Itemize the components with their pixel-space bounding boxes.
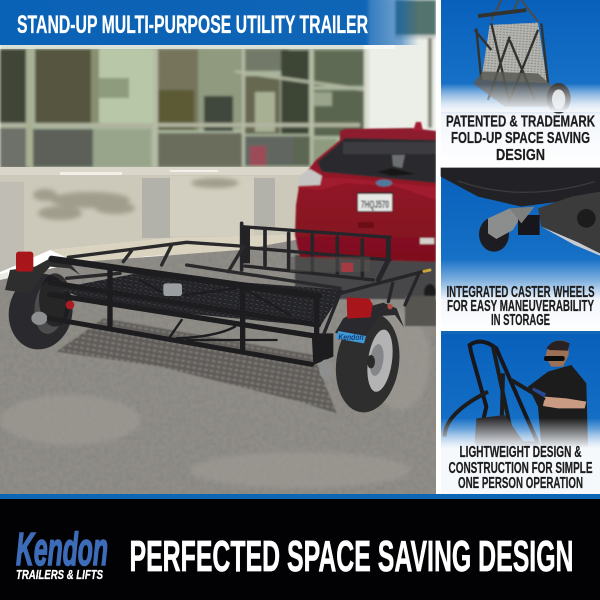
photo: glass building facade xyxy=(0,0,436,170)
footer band xyxy=(0,494,600,600)
caption xyxy=(446,114,595,164)
panel: caster wheels xyxy=(441,168,600,333)
photo: red SUV: 7HQJ570 xyxy=(361,199,389,211)
panel: main trailer photo xyxy=(0,0,436,494)
logo: Kendon: Kendon xyxy=(16,523,108,575)
right wheel xyxy=(330,309,406,417)
right grab rail xyxy=(324,271,427,333)
caption xyxy=(446,284,595,329)
caption: DESIGN xyxy=(496,147,545,164)
right tail light xyxy=(347,297,393,319)
header band xyxy=(0,0,436,49)
photo: man lifting trailer xyxy=(445,340,588,447)
caption xyxy=(448,444,593,492)
far side rail xyxy=(67,242,340,288)
panel: one person operation xyxy=(441,331,600,494)
photo: red SUV xyxy=(295,122,436,326)
deck mesh xyxy=(58,274,343,327)
photo: caster wheel under tire xyxy=(441,168,600,256)
left wheel xyxy=(2,268,80,355)
fade to white xyxy=(441,84,600,112)
trailer xyxy=(2,223,430,417)
trailer shadow xyxy=(57,318,337,413)
right fender with label xyxy=(335,303,404,343)
headboard frame xyxy=(242,223,390,280)
caption: IN STORAGE xyxy=(491,312,550,329)
near side rails xyxy=(49,259,333,365)
photo: concrete wall xyxy=(0,167,310,272)
photo: asphalt ground xyxy=(0,234,436,494)
right fender with label: Kendon xyxy=(338,333,364,342)
logo: Kendon: TRAILERS & LIFTS xyxy=(16,568,103,582)
logo: Kendon xyxy=(16,523,108,582)
heading: STAND-UP MULTI-PURPOSE UTILITY TRAILER xyxy=(17,11,368,39)
hitch and chrome fittings xyxy=(163,283,333,379)
panel: fold-up design xyxy=(441,0,600,166)
left fender and tail light xyxy=(5,252,80,309)
white divider gutter xyxy=(436,0,441,494)
photo: folded trailer xyxy=(473,0,571,114)
fade to white xyxy=(441,418,600,448)
